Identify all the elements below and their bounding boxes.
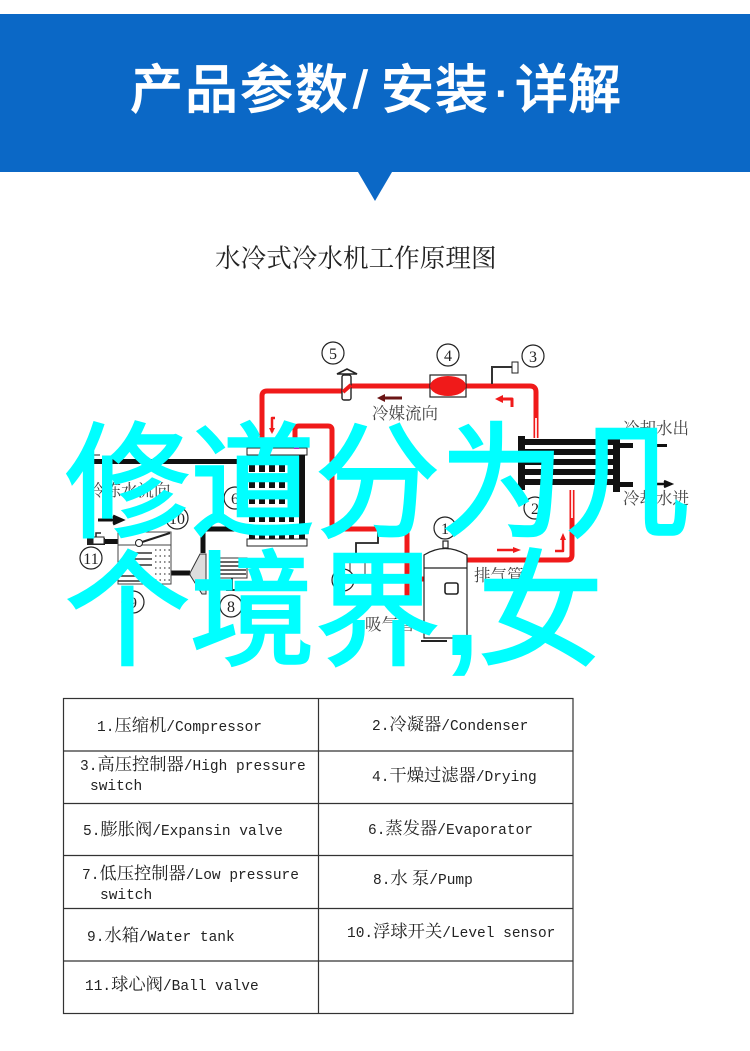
diagram labels: 冷冻水流向 bbox=[88, 481, 170, 500]
numbered callouts: 7 bbox=[339, 573, 347, 590]
water tank bbox=[118, 532, 171, 584]
flow arrows bbox=[269, 394, 566, 553]
cyan overlay headline: 个境界 bbox=[65, 543, 440, 682]
numbered callouts: 5 bbox=[329, 346, 337, 363]
table entries: 9.水箱/Water tank bbox=[87, 926, 235, 946]
table entries bbox=[80, 715, 555, 995]
refrigerant pipe loop bbox=[262, 386, 572, 600]
table entries: 8.水 泵/Pump bbox=[373, 869, 473, 889]
table entries: 7.低压控制器/Low pressure bbox=[82, 864, 299, 884]
parts table bbox=[63, 698, 573, 1014]
numbered callouts: 4 bbox=[444, 348, 452, 365]
header banner bbox=[0, 14, 750, 201]
water pump bbox=[190, 554, 248, 594]
table entries: 11.球心阀/Ball valve bbox=[85, 975, 259, 995]
numbered callouts: 1 bbox=[441, 521, 449, 538]
water pipes bbox=[93, 455, 247, 573]
condenser bbox=[518, 436, 671, 492]
cyan overlay headline: , bbox=[443, 533, 481, 684]
numbered callouts: 10 bbox=[169, 511, 185, 528]
numbered callouts: 8 bbox=[227, 599, 235, 616]
numbered callouts: 6 bbox=[231, 491, 239, 508]
table entries: switch bbox=[90, 779, 142, 795]
numbered callouts: 2 bbox=[531, 501, 539, 518]
diagram labels: 冷媒流向 bbox=[372, 404, 438, 423]
diagram labels bbox=[88, 404, 689, 634]
diagram labels: 冷却水进 bbox=[623, 489, 689, 508]
table entries: 4.干燥过滤器/Drying bbox=[372, 766, 537, 786]
cyan overlay headline: 修道分为几 bbox=[65, 415, 690, 554]
low pressure switch bbox=[350, 530, 378, 575]
table entries: 5.膨胀阀/Expansin valve bbox=[83, 820, 283, 840]
table entries: 1.压缩机/Compressor bbox=[97, 715, 262, 736]
numbered callouts: 3 bbox=[529, 349, 537, 366]
diagram: water chiller schematic bbox=[80, 342, 689, 641]
table entries: 3.高压控制器/High pressure bbox=[80, 755, 306, 775]
cyan overlay headline bbox=[65, 415, 690, 684]
table entries: 10.浮球开关/Level sensor bbox=[347, 922, 555, 942]
numbered callouts bbox=[80, 342, 546, 617]
table entries: switch bbox=[100, 888, 152, 904]
banner title: 产品参数/安装·详解 bbox=[130, 61, 621, 120]
numbered callouts: 9 bbox=[129, 595, 137, 612]
ball valve bbox=[87, 533, 105, 545]
diagram labels: 冷却水出 bbox=[623, 419, 689, 438]
numbered callouts: 11 bbox=[83, 551, 99, 568]
diagram labels: 吸气管 bbox=[365, 615, 414, 634]
evaporator bbox=[247, 445, 307, 546]
high pressure switch bbox=[492, 362, 518, 384]
expansion valve bbox=[337, 369, 357, 400]
compressor bbox=[421, 541, 467, 641]
table grid bbox=[63, 698, 573, 1014]
table entries: 6.蒸发器/Evaporator bbox=[368, 819, 533, 839]
table entries: 2.冷凝器/Condenser bbox=[372, 715, 528, 735]
cyan overlay headline: 女 bbox=[478, 543, 603, 682]
diagram title: 水冷式冷水机工作原理图 bbox=[215, 244, 497, 273]
diagram labels: 排气管 bbox=[474, 566, 524, 585]
drying filter bbox=[430, 375, 466, 397]
